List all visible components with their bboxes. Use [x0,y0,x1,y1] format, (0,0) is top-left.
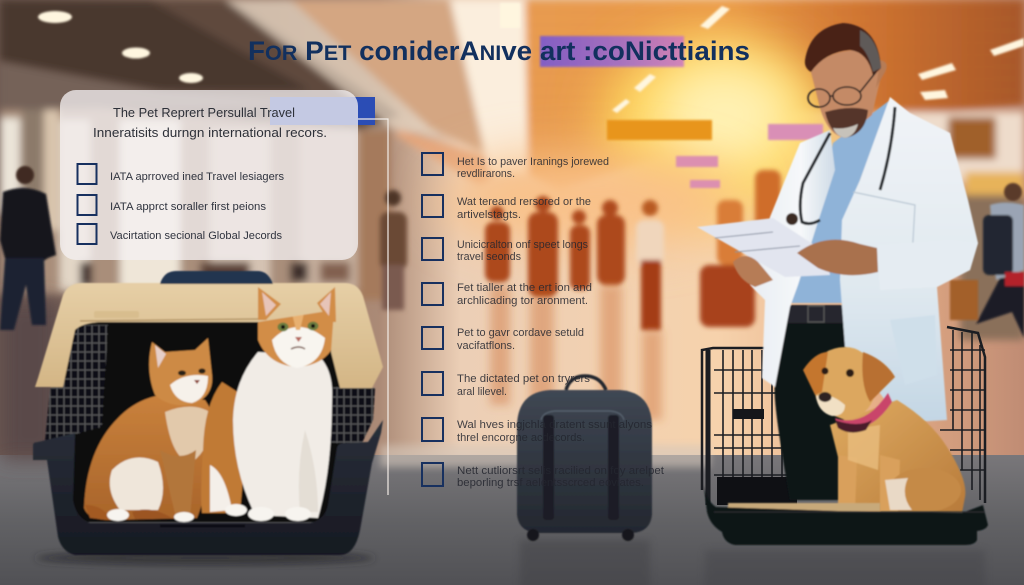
checklist item 2 [422,195,591,221]
carrier left grid [45,325,108,442]
checklist item 5: Pet to gavr cordave setuld [457,327,584,339]
checklist item: Vacirtation secional Global Jecords [110,230,282,242]
paper [697,218,830,277]
checklist item 7: Wal hves ingjchla dratent ssunt alyons [457,419,652,431]
pet carrier with cats [33,271,383,565]
checklist item 5: vacifatflons. [457,340,515,352]
checklist item 3: travel seonds [457,251,521,263]
lab coat left side [750,130,835,387]
checklist item [78,195,266,215]
white and orange cat [201,287,336,521]
checklist item 1: Het Is to paver Iranings jorewed [457,156,609,168]
dog [803,347,965,513]
checklist item 5 [422,327,584,352]
checklist item 3 [422,238,588,263]
checklist item 7: threl encorgne acdecords. [457,432,585,444]
crate base [703,480,988,545]
checklist column [422,153,665,489]
checklist item 8: beporling trsf aelentsscrced eoviates. [457,477,644,489]
travel bag [517,376,652,541]
checklist item 4 [422,282,592,307]
checklist item 8 [422,463,665,489]
veterinarian [697,23,978,500]
carrier interior [72,322,347,522]
checklist item 2: Wat tereand rersored or the [457,196,591,208]
floor streak reflections [490,285,662,420]
wire crate [702,327,985,505]
right wall [900,112,1024,182]
blurred crowd [380,170,781,420]
checklist item 2: artivelstagts. [457,209,521,221]
connector line [358,119,388,495]
orange cat [84,338,217,522]
checklist item: IATA apprct soraller first peions [110,201,266,213]
checklist item 4: Fet tialler at the ert ion and [457,282,592,294]
checklist item 4: archlicading tor aronment. [457,295,588,307]
stethoscope [800,107,895,224]
collar [835,393,892,430]
ceiling lights [38,3,1024,113]
lab coat right side [840,97,978,422]
carrier right grid [320,387,375,443]
panel heading: Inneratisits durngn international recors. [93,125,327,140]
checklist item 7 [422,418,652,444]
shirt [790,100,890,303]
carrier handle [160,271,273,284]
checklist item 3: Unicicralton onf speet longs [457,239,588,251]
glasses [808,72,876,107]
trousers [775,305,848,500]
checklist item 1 [422,153,609,180]
sign behind panel [270,97,375,125]
checklist item 6: aral lilevel. [457,386,507,398]
right sleeve [877,240,978,290]
ceiling [0,0,400,130]
checklist item [78,164,284,184]
head [811,50,882,138]
blurred signs [607,120,823,188]
checklist item 6: The dictated pet on tryrers [457,373,590,385]
panel heading: The Pet Reprert Persullal Travel [113,105,295,120]
carrier lid [35,283,383,388]
checklist item 8: Nett cutliorsrt selis racilied on foy arelpet [457,465,665,477]
floor [0,455,1024,585]
panel heading [93,105,327,140]
title: FOR PET coniderANIve art :coNicttiains [248,36,750,66]
checklist item: IATA aprroved ined Travel lesiagers [110,171,284,183]
right person [950,183,1024,338]
left person [0,166,56,330]
carrier base [33,420,383,555]
panel: travel requirements [60,90,358,260]
left wall [0,95,390,295]
right cat ears over lid [258,287,336,322]
checklist item [78,224,282,244]
belt [788,305,844,323]
bag and crate floor reflections [520,540,650,585]
checklist item 1: revdlirarons. [457,168,515,180]
checklist item 6 [422,372,590,398]
hands [797,240,878,275]
